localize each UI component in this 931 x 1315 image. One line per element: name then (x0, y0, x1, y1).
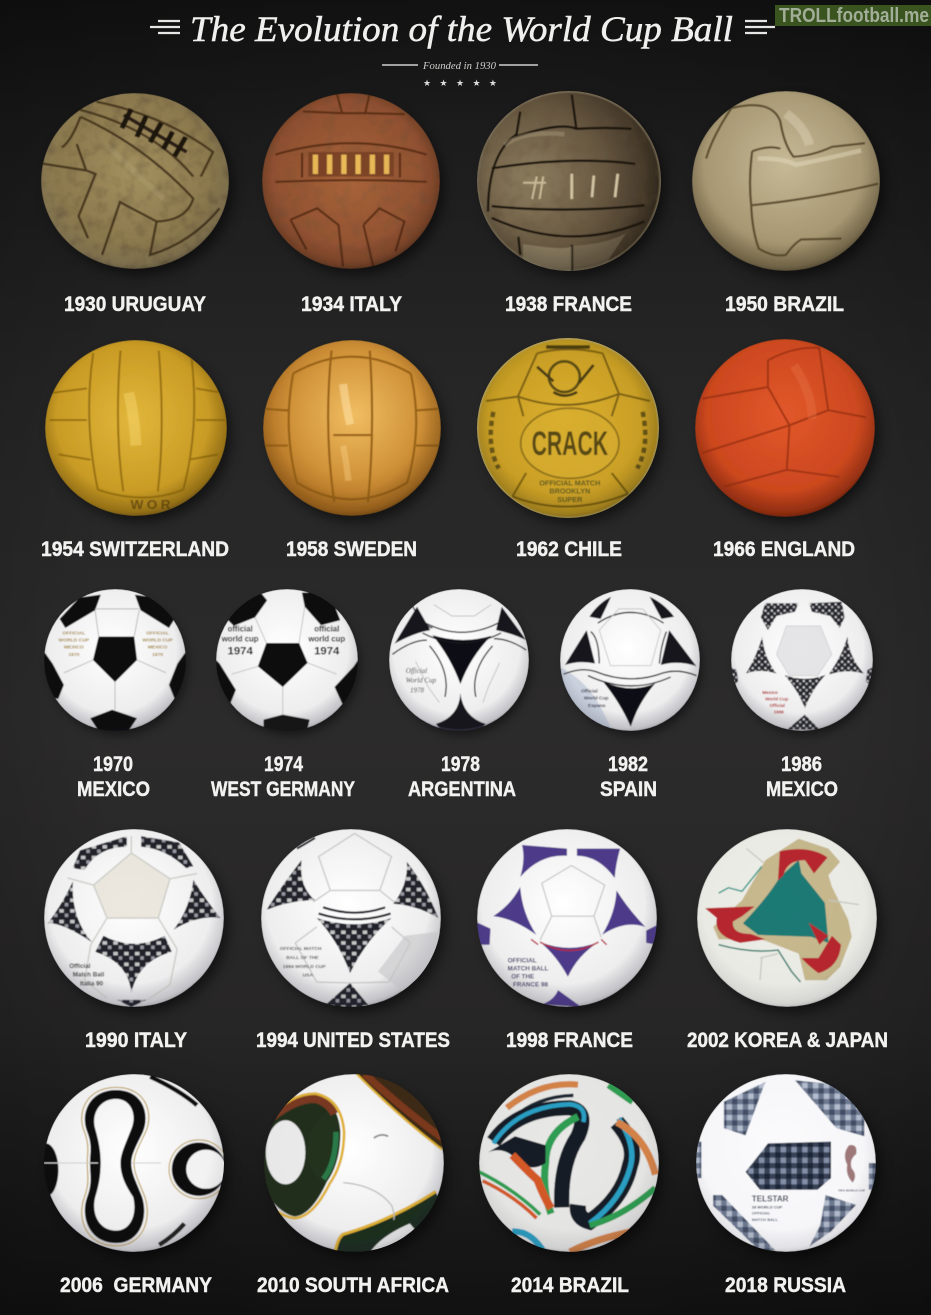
icon: 1986 ball: World Cup (765, 696, 788, 701)
icon: 1982 ball: Espana (588, 703, 606, 709)
icon: 1982 ball (560, 589, 701, 735)
icon: 1986 ball (731, 589, 874, 735)
label: 1950 BRAZIL (725, 293, 844, 316)
label: SPAIN (600, 778, 657, 801)
subtitle rules (382, 64, 538, 66)
item: 2010 South Africa (257, 1074, 449, 1297)
label (408, 753, 516, 801)
item: 1966 England (695, 339, 879, 561)
label: 2006 GERMANY (60, 1274, 212, 1297)
label (211, 753, 355, 801)
icon: 1982 ball: Official (581, 689, 598, 695)
item: 1962 Chile (477, 338, 663, 561)
label: 1934 ITALY (301, 293, 402, 316)
icon: 1994 ball: USA (303, 973, 313, 979)
icon: 1978 ball: 1978 (410, 687, 424, 695)
icon: 1998 ball: OFFICIAL (508, 958, 537, 964)
icon: 1958 ball (263, 340, 445, 521)
item: 1990 Italy (44, 829, 228, 1052)
item: 1994 United States (256, 829, 450, 1052)
icon: 1970 ball: OFFICIAL (146, 630, 169, 636)
label: 1966 ENGLAND (713, 538, 855, 561)
label (77, 753, 150, 801)
item: 1954 Switzerland (41, 340, 231, 561)
label: 1990 ITALY (85, 1029, 187, 1052)
label: 1938 FRANCE (505, 293, 632, 316)
label: 2002 KOREA & JAPAN (687, 1029, 888, 1052)
icon: 1978 ball: World Cup (406, 677, 437, 685)
icon: 1974 ball: world cup (307, 635, 345, 644)
item: 1970 Mexico (44, 589, 187, 801)
icon: 1998 ball (477, 829, 661, 1012)
icon: 1962 ball: OFFICIAL MATCH (539, 479, 600, 488)
icon: 1970 ball (44, 589, 187, 735)
item: 1930 Uruguay (41, 93, 233, 316)
item: 1974 West Germany (211, 589, 359, 801)
item: 2006 Germany (33, 1074, 228, 1297)
label: WEST GERMANY (211, 778, 355, 801)
icon: 1998 ball: FRANCE 98 (513, 982, 548, 989)
item: 1978 Argentina (389, 589, 530, 801)
icon: 1962 ball (477, 338, 663, 523)
icon: 1994 ball: BALL OF THE (286, 955, 319, 961)
icon: 1930 ball (41, 93, 233, 274)
icon: 1970 ball: OFFICIAL (62, 630, 85, 636)
title: The Evolution of the World Cup Ball (190, 9, 733, 49)
icon: 1990 ball: Official (69, 963, 91, 970)
item: 1982 Spain (560, 589, 701, 801)
item: 2014 Brazil (479, 1074, 663, 1297)
icon: 1974 ball: world cup (221, 635, 259, 644)
icon: 1966 ball (695, 339, 879, 522)
icon: 1974 ball: 1974 (314, 645, 340, 657)
icon: 1970 ball: WORLD CUP (142, 638, 174, 644)
icon: 1962 ball: BROOKLYN (549, 487, 590, 496)
label: 1930 URUGUAY (64, 293, 206, 316)
icon: 1998 ball: MATCH BALL (508, 966, 549, 972)
label: 1982 (608, 753, 648, 776)
icon: 1978 ball: Official (406, 667, 427, 675)
label: 1954 SWITZERLAND (41, 538, 229, 561)
icon: 1970 ball: WORLD CUP (59, 638, 90, 644)
item: 1938 France (477, 91, 665, 316)
icon: 1962 ball: SUPER (557, 495, 583, 504)
item: 1986 Mexico (731, 589, 874, 801)
subtitle: Founded in 1930 (422, 60, 496, 72)
label: 1986 (781, 753, 822, 776)
icon: 1994 ball (261, 829, 445, 1012)
icon: 1986 ball: Official (769, 703, 785, 708)
icon: 1990 ball: Italia 90 (80, 981, 104, 988)
item: 1958 Sweden (263, 340, 445, 561)
icon: 2018 ball: MATCH BALL (752, 1217, 779, 1222)
icon: 1950 ball (692, 91, 884, 276)
label: 1970 (93, 753, 133, 776)
icon: 1998 ball: OF THE (511, 974, 534, 981)
icon: 1954 ball (45, 340, 231, 521)
icon: 1974 ball: official (314, 625, 339, 634)
icon: 2006 ball (33, 1074, 228, 1257)
label: 1998 FRANCE (506, 1029, 633, 1052)
icon: 1974 ball: official (228, 625, 253, 634)
icon: 2010 ball (264, 1074, 448, 1257)
label: 1958 SWEDEN (286, 538, 417, 561)
icon: 2018 ball: 18 WORLD CUP (752, 1204, 783, 1209)
icon: 1970 ball: MEXICO (64, 645, 84, 651)
label: MEXICO (766, 778, 838, 801)
stars: ★ ★ ★ ★ ★ (423, 79, 497, 89)
icon: 2018 ball: OFFICIAL (752, 1211, 771, 1216)
icon: 1990 ball (44, 829, 228, 1012)
icon: 1974 ball: 1974 (227, 645, 253, 657)
icon: 2014 ball (479, 1074, 663, 1257)
icon: 1970 ball: 1970 (152, 652, 163, 658)
item: 1934 Italy (262, 93, 444, 316)
icon: 2018 ball: FIFA WORLD CUP (838, 1188, 865, 1192)
icon: 1986 ball: 1986 (774, 709, 784, 714)
icon: 1970 ball: MEXICO (148, 645, 168, 651)
icon: 1994 ball: 1994 WORLD CUP (283, 964, 326, 970)
icon: 1986 ball: Mexico (762, 690, 778, 695)
label: 2014 BRAZIL (511, 1274, 629, 1297)
label: 1994 UNITED STATES (256, 1029, 450, 1052)
label (600, 753, 657, 801)
icon: 1970 ball: 1970 (68, 652, 80, 658)
label: 1974 (264, 753, 303, 776)
icon: 1974 ball (216, 589, 359, 735)
item: 2018 Russia (696, 1074, 880, 1297)
icon: 1954 ball: WOR (131, 497, 171, 512)
icon: 1982 ball: World Cup (584, 696, 608, 702)
icon: 1934 ball (262, 93, 444, 274)
icon: 1994 ball: OFFICIAL MATCH (280, 946, 322, 952)
label: MEXICO (77, 778, 150, 801)
label (766, 753, 838, 801)
icon: 1962 ball: CRACK (532, 425, 608, 463)
icon: 2002 ball (697, 829, 881, 1012)
icon: 2018 ball: TELSTAR (752, 1194, 789, 1203)
label: 1962 CHILE (516, 538, 622, 561)
icon: 2018 ball (696, 1074, 880, 1257)
label: ARGENTINA (408, 778, 516, 801)
label: 2018 RUSSIA (725, 1274, 846, 1297)
title block (150, 9, 775, 89)
item: 1998 France (477, 829, 661, 1052)
item: 2002 Korea & Japan (687, 829, 888, 1052)
item: 1950 Brazil (692, 91, 884, 316)
icon: 1938 ball (477, 91, 665, 276)
title left ornament (150, 21, 180, 33)
label: 1978 (441, 753, 480, 776)
icon: 1990 ball: Match Ball (73, 972, 104, 979)
icon: 1978 ball (389, 589, 530, 735)
label: 2010 SOUTH AFRICA (257, 1274, 449, 1297)
title right ornament (745, 21, 775, 33)
